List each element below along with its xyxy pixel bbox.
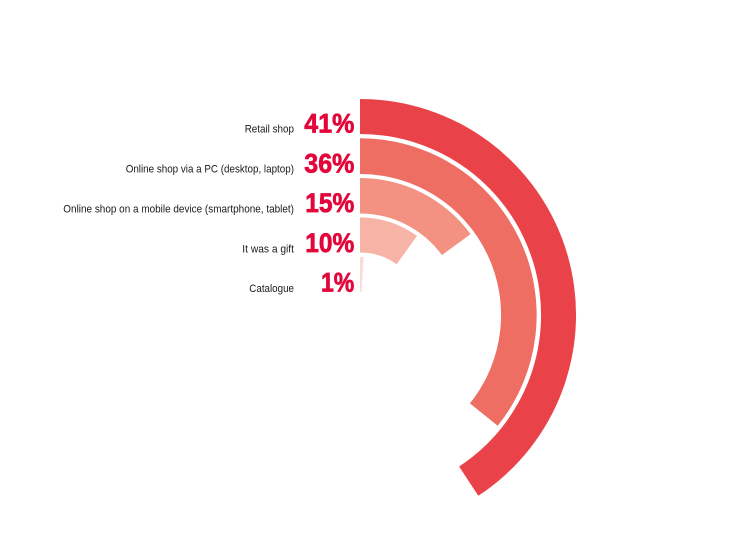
label: catalogue: Catalogue [249,283,294,295]
arc: retail shop 41% [360,99,576,496]
label: retail shop: Retail shop [245,124,294,136]
value: 36%: 36% [304,148,354,178]
value: 1%: 1% [321,268,354,298]
row: online shop via a PC [126,148,354,178]
label: it was a gift: It was a gift [242,243,294,255]
row: it was a gift [242,228,354,258]
row: retail shop [245,108,354,138]
arc: it was a gift 10% [360,218,417,264]
arc: online shop on mobile 15% [360,178,471,255]
label: online shop via a PC: Online shop via a PC (desktop, laptop) [126,164,294,176]
radial bar chart [360,99,576,496]
row: online shop on a mobile device [63,188,354,218]
value: 41%: 41% [304,108,354,138]
arc: online shop via PC 36% [360,138,537,426]
row: catalogue [249,268,354,298]
value: 15%: 15% [305,188,354,218]
label: online shop on a mobile device: Online shop on a mobile device (smartphone, tablet) [63,204,294,216]
value: 10%: 10% [305,228,354,258]
arc: catalogue 1% [360,257,364,292]
